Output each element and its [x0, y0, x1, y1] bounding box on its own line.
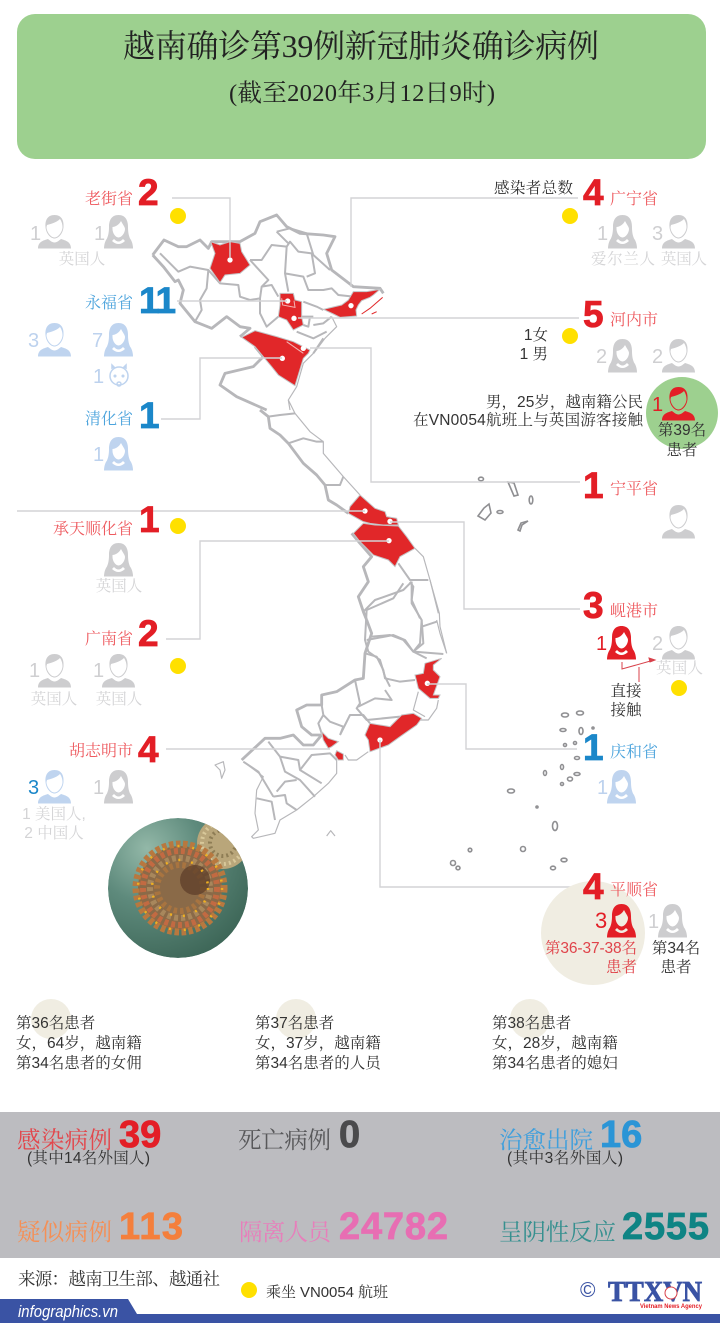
callout: Hanoi: 2 — [652, 346, 663, 368]
callout: Lao Cai: 1 — [94, 223, 105, 245]
callout: Hanoi: 5 — [583, 294, 604, 335]
stat: deaths: 0 — [339, 1114, 360, 1156]
callout: Da Nang — [583, 585, 703, 719]
patient 38 details — [492, 999, 618, 1072]
callout: Quang Ninh: 英国人 — [661, 249, 707, 268]
red: Thua Thien Hue — [348, 495, 398, 525]
website: infographics.vn — [18, 1302, 118, 1321]
callout: Thanh Hoa: 清化省 — [85, 410, 133, 428]
arrow: direct contact — [622, 658, 655, 682]
callout: Quang Ninh: 1 — [597, 223, 608, 245]
callout: Binh Thuan: 患者 — [606, 958, 637, 976]
logo: TTXVN: Vietnam News Agency — [640, 1303, 702, 1310]
callout: Vinh Phuc: 1 — [93, 366, 104, 388]
callout: Khanh Hoa: 1 — [583, 727, 604, 768]
title banner — [17, 14, 706, 159]
callout: Ninh Binh: 1 — [583, 465, 604, 506]
patient 37 details — [255, 999, 382, 1072]
patient 36 details: 女，64岁，越南籍 — [16, 1034, 142, 1052]
callout: Lao Cai: 2 — [138, 172, 159, 213]
callout: Vinh Phuc: 11 — [139, 280, 176, 321]
callout: Quang Nam: 广南省 — [85, 630, 133, 648]
callout: Lao Cai: 老街省 — [85, 190, 133, 208]
callout: Quang Nam: 英国人 — [31, 689, 77, 708]
callout: Khanh Hoa: 庆和省 — [610, 743, 658, 761]
callout: Da Nang: 英国人 — [656, 658, 703, 677]
callout: Binh Thuan: 1 — [648, 911, 659, 933]
callout: Binh Thuan — [541, 866, 700, 985]
legend text: total infected: 感染者总数 — [494, 179, 573, 197]
callout: Hanoi: 河内市 — [610, 311, 658, 329]
callout: Quang Ninh: 爱尔兰人 — [591, 250, 655, 268]
callout: Khanh Hoa: 1 — [597, 777, 608, 799]
red: Quang Nam — [353, 523, 415, 567]
callout: Ho Chi Minh City: 4 — [138, 729, 159, 770]
subtitle date: (截至2020年3月12日9时) — [229, 79, 495, 107]
stat: suspected: 疑似病例 — [17, 1219, 112, 1245]
callout: Thanh Hoa: 1 — [139, 395, 160, 436]
red: Ho Chi Minh City — [322, 732, 338, 748]
callout: Hanoi — [520, 294, 695, 372]
callout: Da Nang: 1 — [596, 633, 607, 655]
stat: deaths: 死亡病例 — [238, 1127, 331, 1153]
connector lines — [17, 198, 580, 887]
callout: Thanh Hoa — [85, 395, 160, 470]
callout: Quang Ninh — [562, 172, 707, 268]
callout: Ho Chi Minh City: 1 — [93, 777, 104, 799]
map of Vietnam — [153, 215, 594, 870]
patient 37 details: 第34名患者的人员 — [255, 1054, 382, 1072]
callout: Vinh Phuc: 永福省 — [85, 294, 133, 312]
callout: Ninh Binh: 宁平省 — [610, 480, 658, 498]
callout: Da Nang: 直接 — [610, 682, 642, 700]
callout: Binh Thuan: 4 — [583, 866, 604, 907]
stat: recovered — [499, 1114, 642, 1167]
callout: Khanh Hoa — [583, 727, 658, 804]
callout: patient 39: 第39名 — [658, 421, 706, 439]
callout: Da Nang: 接触 — [610, 701, 642, 719]
callout: Lao Cai: 英国人 — [59, 249, 105, 268]
callout: patient 39: 男，25岁，越南籍公民 — [486, 393, 643, 411]
callout: Binh Thuan: 第36-37-38名 — [545, 939, 637, 957]
patient 36 details — [16, 999, 142, 1072]
stat: suspected — [17, 1206, 183, 1248]
patient 38 details: 第34名患者的媳妇 — [492, 1054, 618, 1072]
stat: quarantined: 隔离人员 — [239, 1219, 332, 1245]
callout: Quang Ninh: 3 — [652, 223, 663, 245]
red: Thanh Hoa — [242, 331, 310, 386]
callout: Da Nang: 3 — [583, 585, 604, 626]
stat: negative — [499, 1206, 709, 1248]
stat: negative: 2555 — [622, 1206, 709, 1248]
stat: infected: 感染病例 — [17, 1127, 112, 1153]
stat: negative: 呈阴性反应 — [499, 1219, 616, 1245]
callout: Vinh Phuc: 3 — [28, 330, 39, 352]
patient 37 details: 第37名患者 — [255, 1014, 334, 1032]
source line: 来源：越南卫生部、越通社 — [18, 1269, 220, 1289]
central highlands provinces — [365, 580, 447, 687]
callout: Quang Ninh: 广宁省 — [610, 190, 658, 208]
callout: Hanoi: 1女 — [524, 326, 548, 344]
legend: yellow dot: 乘坐 VN0054 航班 — [266, 1284, 388, 1301]
red: Binh Thuan — [365, 713, 422, 752]
callout: Ninh Binh — [583, 465, 695, 538]
callout: Binh Thuan: 3 — [595, 908, 607, 933]
central provinces — [260, 400, 438, 620]
callout: patient 39: 在VN0054航班上与英国游客接触 — [413, 410, 643, 429]
title: 越南确诊第39例新冠肺炎确诊病例 — [123, 28, 599, 64]
callout: Quang Ninh: 4 — [583, 172, 604, 213]
red: Quang Ninh — [323, 289, 380, 317]
stat: infected: 39 — [119, 1114, 161, 1156]
callout: Ho Chi Minh City — [22, 729, 159, 842]
callout: Thanh Hoa: 1 — [93, 444, 104, 466]
logo: TTXVN: TTXVN — [608, 1276, 702, 1308]
callout: Lao Cai: 1 — [30, 223, 41, 245]
callout: Ho Chi Minh City: 1 美国人, — [22, 805, 86, 823]
callout: Ho Chi Minh City: 胡志明市 — [69, 742, 133, 760]
callout: patient 39: 患者 — [666, 441, 698, 459]
callout: Thua Thien Hue: 1 — [139, 499, 160, 540]
callout: Thua Thien Hue — [53, 499, 186, 595]
stat: recovered: (其中3名外国人) — [507, 1149, 623, 1167]
stat: infected: (其中14名外国人) — [27, 1149, 150, 1167]
stat: quarantined: 24782 — [339, 1206, 448, 1248]
callout: Binh Thuan: 第34名 — [652, 939, 700, 957]
stat: deaths — [238, 1114, 360, 1156]
northern provinces — [153, 215, 383, 410]
callout: Binh Thuan: 平顺省 — [610, 881, 658, 899]
callout: Quang Nam: 1 — [93, 660, 104, 682]
stat: suspected: 113 — [119, 1206, 183, 1248]
callout: Vinh Phuc — [28, 280, 176, 388]
callout: Lao Cai — [30, 172, 186, 268]
callout: Hanoi: 2 — [596, 346, 607, 368]
virus image — [108, 817, 249, 958]
logo: TTXVN: © — [580, 1279, 596, 1302]
callout: Quang Nam: 英国人 — [96, 689, 142, 708]
callout: patient 39: 1 — [652, 394, 663, 416]
patient 37 details: 女，37岁，越南籍 — [255, 1034, 381, 1052]
patient 36 details: 第36名患者 — [16, 1014, 95, 1032]
callout: Quang Nam: 1 — [29, 660, 40, 682]
islands — [450, 477, 594, 870]
icon: baby — [110, 365, 128, 386]
patient 36 details: 第34名患者的女佣 — [16, 1054, 142, 1072]
callout: Ho Chi Minh City: 3 — [28, 777, 39, 799]
red: Lao Cai — [210, 242, 250, 283]
callout: Thua Thien Hue: 承天顺化省 — [53, 520, 133, 538]
stat: infected — [17, 1114, 161, 1167]
red: Khanh Hoa — [415, 658, 442, 698]
callout: Da Nang: 岘港市 — [610, 602, 658, 620]
callout: Ho Chi Minh City: 2 中国人 — [24, 824, 84, 842]
callout: Hanoi: 1 男 — [520, 345, 548, 363]
logo: TTXVN — [580, 1276, 702, 1310]
southern provinces — [215, 620, 447, 838]
stat: quarantined — [239, 1206, 448, 1248]
stat: recovered: 16 — [600, 1114, 642, 1156]
footer bar — [0, 1299, 720, 1323]
statistics panel — [0, 1112, 720, 1258]
callout: patient 39 — [413, 377, 718, 459]
callout: Binh Thuan: 患者 — [660, 958, 692, 976]
callout: Vinh Phuc: 7 — [92, 330, 103, 352]
stat: recovered: 治愈出院 — [499, 1127, 593, 1153]
callout: Quang Nam — [29, 613, 186, 708]
callout: Da Nang: 2 — [652, 633, 663, 655]
red: Vinh Phuc and Hanoi — [278, 293, 303, 330]
patient 38 details: 第38名患者 — [492, 1014, 571, 1032]
patient 38 details: 女，28岁，越南籍 — [492, 1034, 618, 1052]
callout: Thua Thien Hue: 英国人 — [96, 576, 142, 595]
callout: Quang Nam: 2 — [138, 613, 159, 654]
